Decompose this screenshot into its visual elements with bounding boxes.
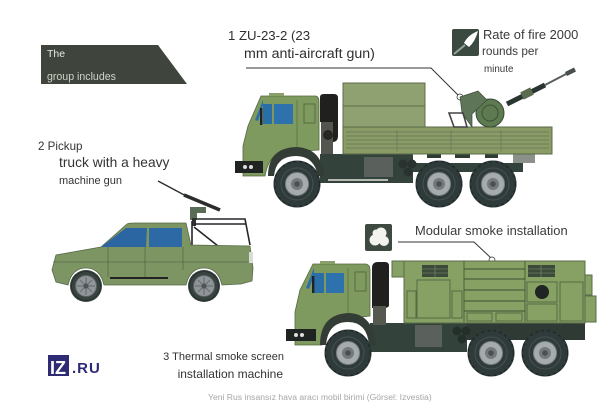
- wheels: [325, 330, 371, 376]
- panels: [464, 261, 525, 322]
- wheels: [70, 270, 102, 302]
- cargo box: [343, 83, 425, 127]
- fender: [320, 313, 376, 345]
- label: modular smoke installation: Modular smoke installation: [415, 223, 568, 238]
- heading: pickup: machine gun: [59, 175, 122, 187]
- module body: [404, 261, 585, 323]
- heading: ZU-23-2: 1 ZU-23-2 (23: [228, 28, 310, 43]
- heading: ZU-23-2: mm anti-aircraft gun): [244, 46, 375, 62]
- icon: rate of fire shell: [452, 29, 479, 56]
- banner: the group includes: The: [47, 48, 65, 60]
- anti-aircraft gun: [449, 70, 575, 127]
- fender: [268, 147, 324, 176]
- heading: pickup: 2 Pickup: [38, 140, 82, 153]
- text: rate of fire: minute: [484, 64, 514, 75]
- callout line: gun: [246, 68, 463, 100]
- windows: [263, 104, 272, 124]
- label: thermal smoke screen: 3 Thermal smoke screen: [163, 351, 284, 363]
- heading: pickup: truck with a heavy: [59, 155, 170, 170]
- label: thermal smoke screen: [163, 351, 284, 381]
- caption: Yeni Rus insansız hava aracı mobil birimi (Görsel: Izvestia): [208, 392, 432, 402]
- logo: IZ.RU: .RU: [72, 360, 101, 377]
- text: rate of fire: Rate of fire 2000: [483, 27, 578, 42]
- text: rate of fire: [482, 27, 578, 75]
- truck 1 with ZU-23-2: [235, 70, 575, 207]
- label: thermal smoke screen: installation machine: [178, 367, 283, 381]
- truck 3 smoke machine: [286, 261, 596, 376]
- chassis: [404, 322, 585, 340]
- roll bar: [192, 219, 250, 246]
- callout line: smoke: [398, 242, 495, 263]
- banner: the group includes: group includes: [47, 71, 116, 83]
- heading: pickup: [38, 140, 170, 187]
- pickup truck with machine gun: [52, 181, 253, 302]
- cab: [243, 96, 319, 176]
- icon: smoke: [365, 224, 392, 251]
- chassis: [320, 154, 413, 183]
- logo: IZ.RU: [48, 355, 101, 378]
- exhaust: [372, 262, 389, 308]
- cab: [295, 264, 370, 345]
- exhaust: [320, 94, 338, 142]
- banner: the group includes: [41, 45, 187, 84]
- flatbed: [343, 127, 552, 154]
- text: rate of fire: rounds per: [482, 44, 538, 58]
- logo: IZ.RU: IZ: [50, 358, 66, 378]
- heading: ZU-23-2: [228, 28, 375, 62]
- tow hitch: [286, 329, 316, 341]
- windows: [101, 228, 147, 247]
- wheels: [274, 161, 320, 207]
- tow hitch: [235, 161, 263, 173]
- windows: [314, 273, 324, 293]
- body: [52, 223, 253, 285]
- machine gun: [158, 181, 220, 226]
